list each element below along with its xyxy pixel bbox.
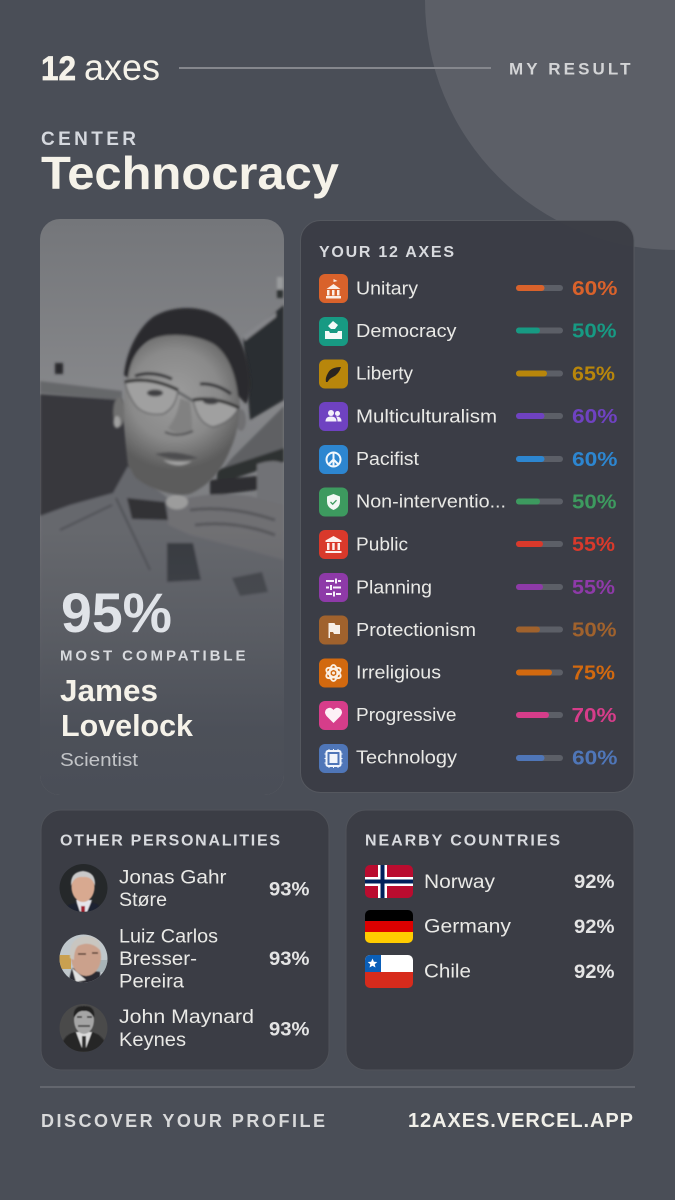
dark wall left <box>40 394 135 516</box>
value: 50% <box>572 620 617 642</box>
panel: other personalities <box>41 810 329 1070</box>
panel: your 12 axes <box>300 220 634 792</box>
bar <box>516 541 563 547</box>
logo: 12 axes: axes <box>84 47 160 88</box>
name: Luiz Carlos <box>119 926 218 948</box>
country: Chile <box>365 955 615 988</box>
name: Chile <box>424 962 471 982</box>
row: Planning <box>319 573 615 602</box>
person name: Lovelock <box>61 708 194 743</box>
icon: peace symbol <box>319 445 348 474</box>
row: Irreligious <box>319 658 615 688</box>
icon: flag <box>319 616 348 644</box>
bar <box>516 498 563 504</box>
person name: James <box>60 673 158 708</box>
row: Public <box>319 530 615 559</box>
footer rule <box>40 1086 635 1088</box>
flag: Norway <box>365 865 413 898</box>
name: Norway <box>424 872 496 893</box>
icon: capitol building <box>319 274 348 303</box>
object and hand <box>210 476 257 496</box>
row: Progressive <box>319 701 617 730</box>
bottom fade overlay <box>40 584 284 795</box>
name: Jonas Gahr <box>119 868 227 888</box>
header label: my result: MY RESULT <box>509 60 631 78</box>
name: Pereira <box>119 972 184 992</box>
bar <box>516 328 563 334</box>
label: Multiculturalism <box>356 406 497 426</box>
title: technocracy: Technocracy <box>41 147 339 199</box>
value: 93% <box>269 1020 310 1040</box>
value: 60% <box>572 278 618 300</box>
value: 92% <box>574 872 615 893</box>
icon: chip <box>319 744 348 773</box>
header rule <box>179 67 491 69</box>
value: 60% <box>572 748 618 770</box>
brows <box>135 374 172 379</box>
dark cabinet right <box>243 305 284 420</box>
value: 92% <box>574 962 615 983</box>
match percentage: 95% <box>61 581 172 644</box>
most compatible label: MOST COMPATIBLE <box>60 648 246 664</box>
value: 93% <box>269 880 310 900</box>
value: 75% <box>572 662 615 684</box>
label: Technology <box>356 746 458 768</box>
shirt <box>40 466 284 626</box>
bar <box>516 712 563 718</box>
label: Irreligious <box>356 662 441 682</box>
person role: Scientist <box>60 750 138 770</box>
value: 60% <box>572 406 618 428</box>
label: Unitary <box>356 278 419 298</box>
value: 60% <box>572 449 618 471</box>
label: Public <box>356 534 408 554</box>
bar <box>516 456 563 462</box>
label: Planning <box>356 576 432 598</box>
row: Technology <box>319 744 618 773</box>
equipment panel <box>225 406 284 467</box>
row: Unitary <box>319 274 618 303</box>
flag: Chile <box>365 955 413 988</box>
subtitle: center: CENTER <box>41 129 136 150</box>
value: 70% <box>572 705 617 727</box>
portrait photo <box>40 219 285 796</box>
heading: OTHER PERSONALITIES <box>60 832 280 850</box>
logo: 12 axes: 12 <box>41 50 76 88</box>
heading: NEARBY COUNTRIES <box>365 832 560 850</box>
ears <box>113 397 125 427</box>
flag: Germany <box>365 910 413 943</box>
footer: discover your profile: DISCOVER YOUR PROFILE <box>41 1111 325 1131</box>
label: Democracy <box>356 320 457 341</box>
person name <box>60 673 194 743</box>
icon: feather <box>319 360 348 388</box>
nose and mouth <box>170 398 192 433</box>
value: 55% <box>572 534 615 556</box>
row: Democracy <box>319 317 617 346</box>
icon: bank <box>319 530 348 559</box>
label: Non-interventio... <box>356 490 506 512</box>
logo: 12 axes <box>41 47 160 88</box>
avatar <box>59 1004 108 1052</box>
panel: nearby countries <box>346 810 634 1070</box>
icon: shield <box>319 488 348 516</box>
bar <box>516 626 563 632</box>
icon: heart <box>319 701 348 730</box>
value: 50% <box>572 492 617 514</box>
glasses <box>125 381 178 414</box>
footer: site url: 12AXES.VERCEL.APP <box>408 1110 633 1132</box>
avatar <box>59 864 108 912</box>
panel: top match photo card <box>40 219 285 796</box>
icon: ballot box <box>319 317 348 346</box>
icon: atom <box>319 658 348 688</box>
name: Støre <box>119 890 167 911</box>
hair <box>124 308 250 404</box>
value: 50% <box>572 320 617 342</box>
bar <box>516 413 563 419</box>
person: John Maynard Keynes <box>59 1004 310 1052</box>
person: Luiz Carlos Bresser-Pereira <box>60 928 309 988</box>
name: Keynes <box>119 1030 186 1051</box>
name: Bresser- <box>119 949 197 970</box>
label: Pacifist <box>356 448 419 469</box>
avatar <box>59 934 108 983</box>
label: Protectionism <box>356 619 476 640</box>
bar <box>516 584 563 590</box>
bar <box>516 285 563 291</box>
label: Progressive <box>356 704 456 725</box>
face <box>124 333 240 495</box>
value: 55% <box>572 577 615 599</box>
label: Liberty <box>356 362 414 384</box>
row: Pacifist <box>319 445 618 474</box>
row: Protectionism <box>319 616 617 644</box>
row: Non-interventionism <box>319 488 617 516</box>
decorative corner circle <box>425 0 675 250</box>
value: 65% <box>572 364 615 386</box>
heading: YOUR 12 AXES <box>319 244 454 261</box>
value: 93% <box>269 949 310 970</box>
bar <box>516 670 563 676</box>
person: Jonas Gahr Støre <box>59 864 310 912</box>
country: Germany <box>365 910 615 943</box>
icon: sliders <box>319 573 348 602</box>
icon: people <box>319 402 348 431</box>
row: Multiculturalism <box>319 402 618 431</box>
name: Germany <box>424 916 512 938</box>
row: Liberty <box>319 360 615 388</box>
name <box>119 926 218 992</box>
name <box>119 868 227 911</box>
country: Norway <box>365 865 615 898</box>
name: John Maynard <box>119 1007 254 1028</box>
value: 92% <box>574 917 615 938</box>
bar <box>516 370 563 376</box>
bar <box>516 755 563 761</box>
name <box>119 1007 254 1051</box>
